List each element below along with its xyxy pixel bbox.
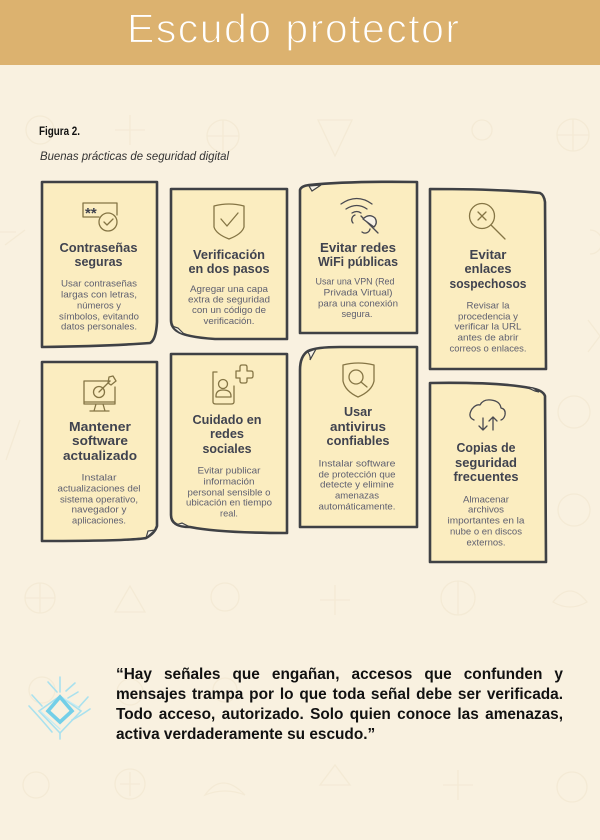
panel: usar antivirus confiables [300, 347, 417, 527]
icon: cloud sync [470, 400, 505, 430]
text block: Privada Virtual) [324, 288, 392, 298]
text block [316, 276, 398, 320]
heading: software [72, 434, 128, 448]
text block: Instalar software [318, 458, 396, 470]
icon: shield check [214, 204, 244, 239]
text block: Agregar una capa [190, 284, 269, 295]
text block [318, 458, 396, 512]
text block: Usar una VPN (Red [316, 276, 394, 288]
text block: detecte y elimine [320, 480, 394, 490]
text block: símbolos, evitando [59, 312, 139, 322]
quote: activa verdaderamente su escudo.” [116, 726, 375, 743]
title: Escudo protector [127, 6, 459, 52]
text block [59, 278, 139, 332]
text block: verificar la URL [454, 322, 522, 332]
heading: Copias de [456, 441, 516, 455]
text block: personal sensible o [188, 488, 270, 498]
panel: copias de seguridad frecuentes [430, 383, 546, 562]
text block [448, 494, 525, 548]
heading: seguras [74, 255, 123, 269]
heading: sospechosos [450, 277, 527, 291]
text block: procedencia y [458, 312, 518, 322]
heading [188, 248, 270, 276]
heading: redes [210, 427, 244, 441]
text block: datos personales. [61, 322, 137, 332]
heading: Mantener [69, 420, 131, 434]
panel: evitar enlaces sospechosos [430, 189, 546, 369]
panel: contraseñas seguras [42, 182, 157, 347]
text block: aplicaciones. [72, 516, 126, 526]
quote: mensajes trampa por lo que toda señal debe ser verificada. [116, 686, 563, 703]
icon: wifi crossed [341, 198, 378, 233]
text block [58, 472, 140, 526]
text block: extra de seguridad [188, 294, 270, 306]
heading: confiables [326, 434, 390, 448]
text block: importantes en la [448, 516, 525, 526]
text block: archivos [468, 504, 504, 516]
figure label: Figura 2. [39, 126, 80, 138]
icon: magnifier cross [470, 204, 505, 239]
text block [188, 284, 270, 327]
text block: Almacenar [463, 494, 509, 506]
quote [116, 666, 563, 743]
panel: mantener software actualizado [42, 362, 157, 541]
heading [454, 441, 519, 484]
heading: Usar [344, 405, 372, 419]
text block: real. [220, 508, 238, 520]
heading: en dos pasos [188, 262, 270, 276]
text block: segura. [342, 309, 372, 320]
text block: automáticamente. [318, 502, 396, 512]
icon: password check: ** [85, 205, 97, 222]
quote: “Hay señales que engañan, accesos que confunden y [116, 666, 563, 683]
heading: Evitar redes [320, 241, 396, 255]
heading [450, 248, 527, 291]
heading: Verificación [193, 248, 265, 262]
heading: enlaces [464, 262, 512, 276]
text block: Usar contraseñas [61, 278, 137, 290]
icon: crystal diamond [29, 677, 90, 739]
heading: sociales [202, 442, 252, 456]
text block: largas con letras, [61, 290, 137, 300]
icon: shield magnifier [343, 363, 374, 397]
text block: verificación. [204, 316, 254, 327]
text block: Revisar la [466, 300, 510, 312]
text block [186, 466, 272, 520]
text block: con un código de [192, 305, 266, 316]
heading [63, 420, 137, 463]
text block: actualizaciones del [58, 484, 140, 494]
text block: antes de abrir [458, 332, 518, 344]
text block: sistema operativo, [60, 494, 138, 506]
text block: Instalar [82, 472, 116, 484]
panel: evitar redes wifi públicas [300, 182, 417, 333]
figure caption: Buenas prácticas de seguridad digital [40, 149, 229, 163]
heading: seguridad [455, 456, 517, 470]
heading: Cuidado en [192, 413, 262, 427]
text block: información [204, 476, 254, 488]
text block: números y [77, 300, 121, 312]
heading [192, 413, 262, 456]
icon: profile plus [213, 365, 253, 404]
heading [326, 405, 390, 448]
text block: amenazas [335, 490, 379, 502]
text block: de protección que [318, 470, 396, 480]
quote: Todo acceso, autorizado. Solo quien conoce las amenazas, [116, 706, 563, 723]
heading: Evitar [470, 248, 507, 262]
text block: ubicación en tiempo [186, 498, 272, 508]
text block: Evitar publicar [198, 466, 260, 476]
text block: navegador y [72, 504, 127, 516]
heading [60, 241, 138, 269]
heading [318, 241, 398, 269]
text block [450, 300, 526, 354]
text block: nube o en discos [450, 526, 522, 538]
heading: Contraseñas [60, 241, 138, 255]
header band [0, 0, 600, 65]
panel: cuidado en redes sociales [171, 354, 287, 533]
heading: frecuentes [454, 470, 519, 484]
text block: para una conexión [318, 298, 398, 310]
text block: externos. [466, 538, 506, 548]
heading: antivirus [330, 420, 386, 434]
heading: WiFi públicas [318, 255, 398, 269]
icon: monitor target [84, 376, 116, 411]
panel: verificación en dos pasos [171, 189, 287, 339]
text block: correos o enlaces. [450, 344, 526, 354]
icon: password check [83, 203, 117, 231]
heading: actualizado [63, 449, 137, 463]
